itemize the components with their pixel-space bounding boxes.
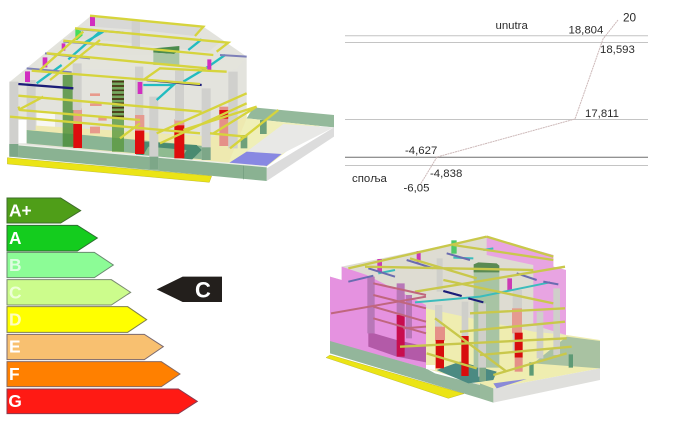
navy and violet beams xyxy=(348,253,558,302)
class A+ xyxy=(7,198,81,223)
yellow ground strip xyxy=(326,355,464,398)
class A: A xyxy=(9,228,22,248)
plinth xyxy=(330,341,480,398)
class A xyxy=(7,225,97,251)
class E xyxy=(7,334,163,360)
right floor xyxy=(533,337,600,368)
class E: E xyxy=(9,337,21,357)
chart labels: -4,838 xyxy=(430,168,462,180)
class B: B xyxy=(9,255,22,275)
temperature chart xyxy=(345,10,648,194)
chart labels: 20 xyxy=(623,10,637,24)
layer boundary lines xyxy=(345,36,648,166)
class D xyxy=(7,307,147,332)
lift shaft xyxy=(474,268,499,368)
class G: G xyxy=(8,391,22,411)
yellow beams xyxy=(348,237,572,375)
class F: F xyxy=(9,364,20,384)
lift block xyxy=(153,46,179,54)
class G xyxy=(7,389,197,414)
class C: C xyxy=(9,282,22,302)
class D: D xyxy=(9,309,22,329)
top 3D building model xyxy=(7,16,334,182)
class F xyxy=(7,362,180,387)
yellow slab beams xyxy=(10,16,278,148)
grey columns xyxy=(9,21,238,169)
energy rating scale xyxy=(7,198,197,414)
magenta and green accents xyxy=(377,251,512,291)
cyan beams xyxy=(37,32,225,100)
chart labels: -4,627 xyxy=(405,145,437,157)
chart labels: -6,05 xyxy=(404,182,429,194)
current rating marker C xyxy=(157,277,222,302)
navy beams xyxy=(18,80,202,88)
right wing slab xyxy=(228,107,334,181)
chart labels: 17,811 xyxy=(585,108,619,120)
green shafts xyxy=(63,75,74,147)
pink side wall xyxy=(330,267,426,368)
bottom 3D building model with pink walls xyxy=(326,237,600,403)
chart labels: 18,804 xyxy=(568,24,603,36)
class B xyxy=(7,252,113,278)
chart labels: споља xyxy=(352,173,388,185)
dark pit xyxy=(437,362,497,383)
red columns xyxy=(435,327,445,341)
plinth xyxy=(9,144,267,181)
pale red pieces xyxy=(90,93,107,133)
temperature curve xyxy=(420,20,618,185)
magenta and green accents xyxy=(25,16,211,94)
grey columns xyxy=(435,258,560,377)
cyan beams xyxy=(378,248,550,302)
chart labels: unutra xyxy=(496,20,528,32)
class C xyxy=(7,280,131,305)
red columns xyxy=(73,124,82,148)
chart labels: 18,593 xyxy=(600,44,635,56)
chart labels xyxy=(352,10,637,194)
yellow ground strip xyxy=(7,158,212,182)
class A+: A+ xyxy=(9,201,32,221)
current rating marker C: C xyxy=(195,277,211,302)
